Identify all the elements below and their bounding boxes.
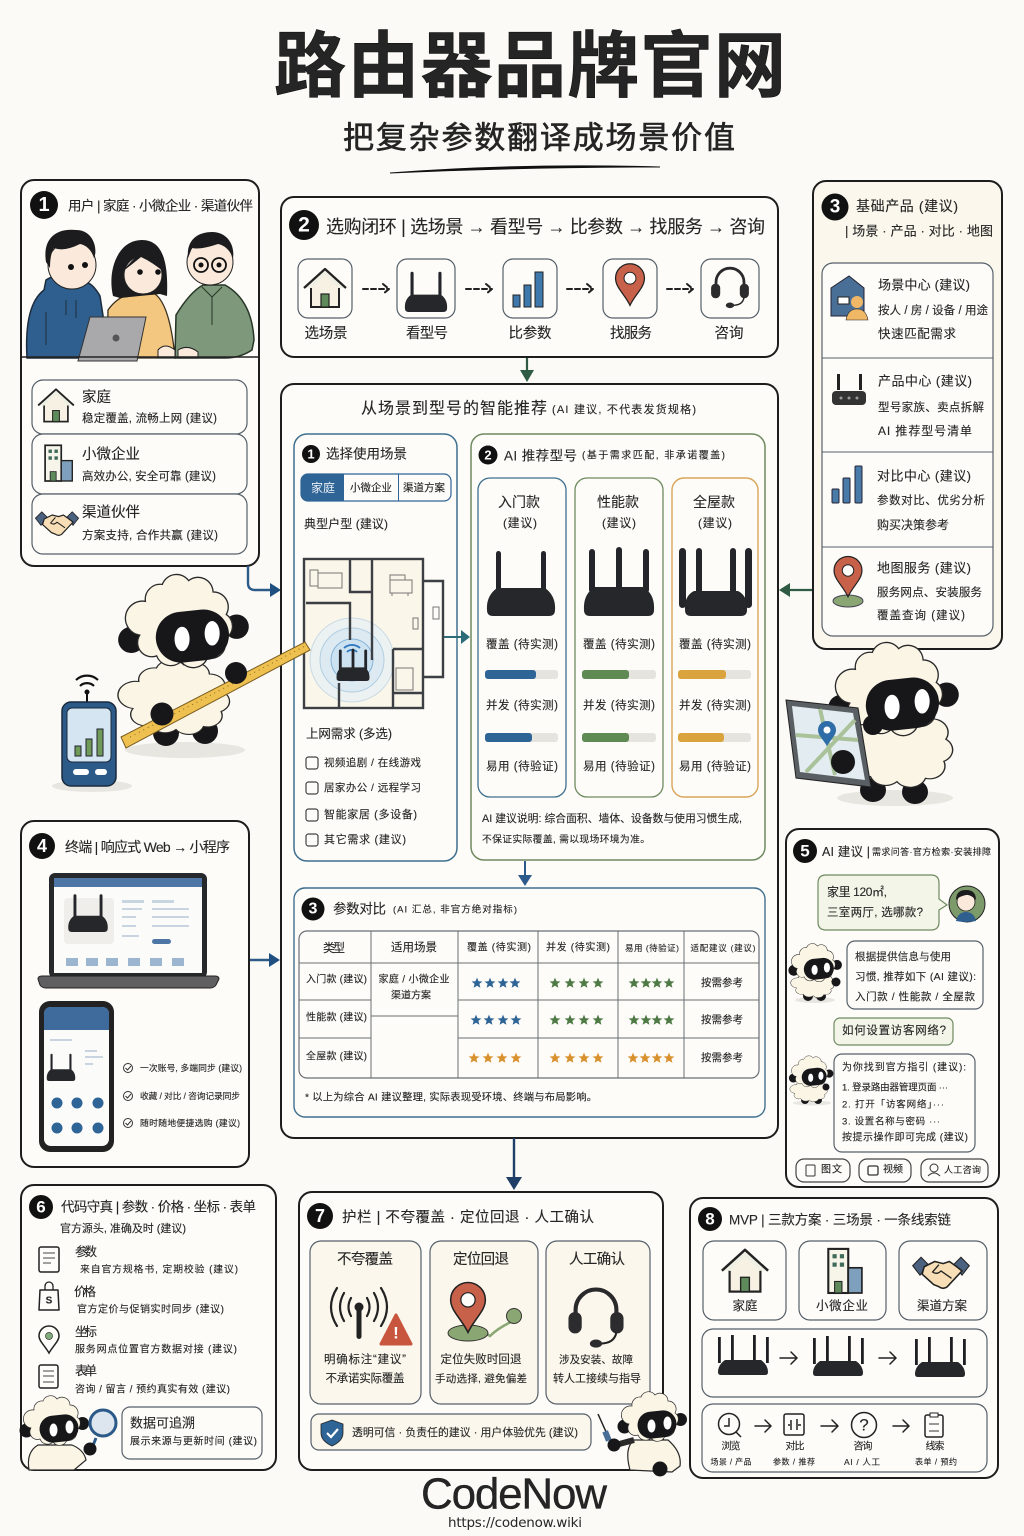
subtitle: 把复杂参数翻译成场景价值 [343,120,735,156]
panel 4: terminals [21,821,249,1167]
badge 3: 3 [830,196,840,218]
arrow head [461,630,470,644]
step: scene [298,259,352,342]
row: lead funnel: 对比 [786,1440,804,1452]
tabs: 家庭 [311,480,335,495]
comparison table: 性能款 (建议) [306,1010,367,1024]
map tablet [786,700,871,787]
main panel heading: (AI 建议, 不代表发货规格) [552,402,696,416]
item: price: 官方定价与促销实时同步 (建议) [77,1302,224,1316]
sub-panel heading: (AI 汇总, 非官方绝对指标) [393,904,517,916]
card: no overclaim: 不承诺实际覆盖 [326,1371,404,1385]
item: coordinates: 服务网点位置官方数据对接 (建议) [75,1342,237,1356]
coverage bar [485,670,558,679]
icon: antenna warning [331,1288,411,1344]
checkbox list: 智能家居 (多设备) [324,807,417,821]
item: coordinates: 坐标 [75,1325,97,1339]
card: location fallback: 定位失败时回退 [440,1352,522,1366]
illustration: phone [39,1001,114,1152]
sub-panel: select scene [294,434,457,861]
assistant steps bubble: 按提示操作即可完成 (建议) [842,1130,968,1144]
icon: compare [784,1414,804,1435]
sub-panel: AI recommended models [471,434,765,860]
icon: pin fallback [448,1282,522,1341]
badge: 2 [484,448,492,462]
badge 5: 5 [800,842,810,860]
traceable data callout: 展示来源与更新时间 (建议) [130,1434,257,1448]
card: entry: 覆盖 (待实测) [486,637,558,651]
panel 3: base products [813,181,1002,649]
mascot: sheep pointing [598,1392,687,1476]
row: product center: AI 推荐型号清单 [878,424,972,438]
row: home: 稳定覆盖, 流畅上网 (建议) [82,411,217,425]
row: scene center: 按人 / 房 / 设备 / 用途 [878,303,988,317]
checkbox list: 居家办公 / 远程学习 [324,781,421,794]
item: form [39,1364,230,1396]
button: video: 视频 [883,1162,903,1176]
badge 8 [698,1207,722,1231]
inner list [822,263,993,636]
badge 1: 1 [38,194,50,216]
panel 8: MVP [690,1198,998,1478]
floor plan label: 典型户型 (建议) [304,516,388,531]
assistant steps bubble: 3. 设置名称与密码 ··· [842,1116,940,1128]
row: compare center: 购买决策参考 [877,517,949,532]
coverage bar [678,670,751,679]
step: service [603,259,657,342]
row: lead funnel: 咨询 [854,1440,872,1452]
panel 5: AI suggestion chat [786,829,999,1187]
user question bubble: 如何设置访客网络? [842,1023,946,1037]
assistant steps bubble: 2. 打开「访客网络」··· [842,1098,944,1110]
AI note: 不保证实际覆盖, 需以现场环境为准。 [482,832,650,846]
tabs: 小微企业 [350,481,392,494]
trust bar: 透明可信 · 负责任的建议 · 用户体验优先 (建议) [352,1425,578,1439]
icon: antenna warning: ! [393,1324,399,1342]
row: map service: 服务网点、安装服务 [877,585,982,599]
icon: browse [718,1414,741,1437]
card: whole home [672,478,758,797]
card: performance [575,478,663,797]
panel 4 heading: 终端 | 响应式 Web → 小程序 [65,839,230,855]
tabs [301,474,451,501]
feature list: 一次账号, 多端同步 (建议) [140,1062,242,1073]
panel 6 heading: 代码守真 | 参数 · 价格 · 坐标 · 表单 [61,1198,256,1214]
row: lead funnel: 浏览 [722,1440,740,1452]
arrow head [779,583,790,597]
comparison table: 并发 (待实测) [546,940,610,954]
card: whole home: 易用 (待验证) [679,759,751,773]
panel 5 heading: AI 建议 | [822,845,870,859]
card: human confirmation: 人工确认 [569,1251,626,1268]
user bubble [818,875,947,930]
card: no overclaim [310,1241,421,1404]
user bubble: 家里 120㎡, [827,884,887,899]
card: location fallback [430,1241,538,1404]
panel 8 heading: MVP | 三款方案 · 三场景 · 一条线索链 [729,1212,952,1228]
item: params [39,1244,238,1276]
badge 3 [822,194,848,220]
arrow: floor plan to recommended models [444,636,462,638]
card: entry: 入门款 [498,494,540,510]
card: no overclaim: 明确标注“建议” [324,1352,406,1366]
row: home: 家庭 [82,389,111,406]
comparison table: 类型 [323,941,345,955]
row: small business: 小微企业 [82,445,140,463]
small sheep [789,1056,833,1106]
button: article [796,1159,850,1182]
illustration: three users with laptop [27,230,254,361]
item: price [39,1282,224,1316]
row: router lineup [702,1329,987,1397]
subtitle swoosh [390,166,660,173]
sub-panel heading: (基于需求匹配, 非承诺覆盖) [582,448,725,462]
badge 7 [307,1203,333,1229]
row: small business: 高效办公, 安全可靠 (建议) [82,469,216,483]
card: channel [899,1241,987,1320]
traceable data callout [122,1407,262,1459]
badge [478,446,498,464]
badge 4 [29,833,55,859]
comparison table: 全屋款 (建议) [306,1050,367,1062]
router [679,548,752,616]
row: compare center [832,466,985,532]
assistant bubble: 根据提供信息与使用 [855,950,951,963]
badge 1 [30,191,58,219]
arrow head [520,370,534,382]
step: model: 看型号 [406,325,448,342]
badge 5 [793,839,817,863]
item: coordinates [39,1325,237,1356]
card: performance: 性能款 [597,494,639,510]
illustration: laptop [38,873,219,988]
icon: clipboard [925,1413,943,1437]
card: entry [478,478,566,797]
comparison table: 按需参考 [701,976,743,989]
arrow head [269,953,280,967]
button: video [859,1159,911,1182]
assistant steps bubble: 1. 登录路由器管理页面 ··· [842,1082,948,1094]
card: channel: 渠道方案 [917,1298,967,1313]
card: whole home: 并发 (待实测) [679,698,751,712]
item: params: 来自官方规格书, 定期校验 (建议) [80,1262,238,1276]
row: map service: 覆盖查询 (建议) [877,608,965,622]
AI note: AI 建议说明: 综合面积、墙体、设备数与使用习惯生成, [482,811,742,825]
row: map service: 地图服务 (建议) [877,560,971,576]
arrow head [270,583,281,597]
row: lead funnel: AI / 人工 [844,1457,880,1467]
badge 6: 6 [36,1198,46,1216]
step: scene: 选场景 [304,325,348,342]
card: small business: 小微企业 [816,1298,868,1313]
feature list: 随时随地便捷选购 (建议) [140,1117,240,1128]
sub-panel heading: 选择使用场景 [326,446,407,462]
row: product center: 型号家族、卖点拆解 [878,400,984,414]
button: human consult [921,1159,988,1182]
row: lead funnel: 线索 [926,1440,944,1452]
icon: question: ? [859,1416,869,1434]
row: scene center: 场景中心 (建议) [878,278,970,292]
ground shadow [125,742,245,758]
comparison table: 覆盖 (待实测) [467,940,531,954]
badge 8: 8 [705,1210,715,1228]
concurrency bar [582,733,656,742]
row: compare center: 参数对比、优劣分析 [877,493,985,507]
user avatar [949,886,985,922]
arrow: recommendation to guardrails [513,1138,515,1178]
arrow [667,284,693,294]
sub-panel heading: 参数对比 [333,900,386,916]
url: https://codenow.wiki [448,1515,582,1531]
card: home: 家庭 [732,1298,758,1313]
item: form: 表单 [75,1364,97,1378]
coverage bar [582,670,656,679]
ruler [121,642,310,748]
user question bubble [834,1018,953,1045]
title: 路由器品牌官网 [274,27,786,107]
row: channel partner [32,494,247,554]
feature list: 收藏 / 对比 / 咨询记录同步 [140,1090,240,1101]
comparison table: 渠道方案 [391,988,431,1002]
card: location fallback: 手动选择, 避免偏差 [435,1372,527,1385]
comparison table: 按需参考 [701,1051,743,1064]
icon: headset [568,1290,624,1348]
checkbox list: 其它需求 (建议) [324,832,406,846]
arrow head [506,1177,522,1190]
sheep body [118,660,230,746]
comparison table: 易用 (待验证) [625,943,679,953]
card: performance: 覆盖 (待实测) [583,637,655,651]
button: human consult: 人工咨询 [944,1164,981,1175]
badge [302,898,324,920]
sub-panel: parameter comparison [294,888,765,1117]
comparison table: 适用场景 [391,940,437,954]
step: compare [503,259,557,342]
row: map service [833,556,982,622]
badge 7: 7 [315,1206,325,1226]
assistant bubble: 入门款 / 性能款 / 全屋款 [855,990,976,1003]
arrow: terminals to recommendation [250,959,270,961]
card: entry: 并发 (待实测) [486,698,558,712]
logo: CodeNow [421,1470,607,1518]
row: compare center: 对比中心 (建议) [877,468,971,484]
table footnote: * 以上为综合 AI 建议整理, 实际表现受环境、终端与布局影响。 [305,1090,597,1104]
main panel: smart recommendation [281,384,778,1138]
card: small business [799,1241,886,1320]
badge 6 [29,1195,53,1219]
card: home [703,1241,786,1320]
router [584,547,654,616]
row: lead funnel: 参数 / 推荐 [773,1456,815,1466]
row: lead funnel [702,1404,987,1472]
card: no overclaim: 不夸覆盖 [337,1251,393,1268]
row: channel partner: 方案支持, 合作共赢 (建议) [82,528,218,542]
card: whole home: 全屋款 [693,494,735,510]
row: product center [832,374,984,438]
step: compare: 比参数 [508,325,552,342]
row: product center: 产品中心 (建议) [878,374,972,388]
row: scene center [831,276,988,341]
comparison table: 家庭 / 小微企业 [378,972,450,986]
panel 3 subheading: | 场景 · 产品 · 对比 · 地图 [845,224,993,238]
panel 1 divider [21,356,259,358]
row: lead funnel: 场景 / 产品 [710,1456,752,1466]
arrow head [518,875,532,886]
item: price: 价格 [74,1284,96,1299]
button: article: 图文 [821,1162,842,1176]
card: performance: 易用 (待验证) [583,759,655,773]
checkbox list: 视频追剧 / 在线游戏 [324,756,422,769]
assistant bubble [847,941,983,1009]
sub-panel heading [504,448,725,464]
panel 1: users [21,180,259,566]
panel 7 heading: 护栏 | 不夸覆盖 · 定位回退 · 人工确认 [342,1209,594,1226]
router [487,551,555,616]
panel 2: purchase loop [281,197,778,357]
badge 4: 4 [37,836,47,856]
step: consult [701,259,759,342]
panel 3 heading: 基础产品 (建议) [856,198,958,214]
step: model [397,259,455,342]
concurrency bar [485,733,558,742]
comparison table [299,931,759,1078]
arrow: loop to recommendation [526,358,528,372]
step: consult: 咨询 [714,325,744,342]
sheep head [118,574,249,668]
arrow: models to comparison [524,861,526,876]
sub-panel heading: AI 推荐型号 [504,448,577,464]
tabs: 渠道方案 [403,481,445,494]
arrow: products to recommendation [790,589,813,591]
AI note [482,811,742,846]
feature list [124,1062,242,1128]
card: entry: (建议) [503,516,537,530]
card: human confirmation [546,1241,650,1404]
item: params: 参数 [75,1244,97,1259]
assistant steps bubble [834,1054,975,1152]
small sheep [788,944,842,1003]
row: channel partner: 渠道伙伴 [82,504,140,521]
panel 1 heading: 用户 | 家庭 · 小微企业 · 渠道伙伴 [68,198,253,214]
item: price: S [46,1296,53,1306]
comparison table: 按需参考 [701,1013,743,1026]
star ratings [469,978,674,1063]
row: lead funnel: 表单 / 预约 [915,1456,957,1466]
concurrency bar [678,733,751,742]
mascot: sheep with map tablet [786,642,959,806]
badge 2 [289,210,319,240]
panel 5 heading [822,845,991,859]
checkbox list [306,756,422,846]
sub-panel heading [333,900,517,916]
panel 7: guardrails [299,1192,687,1476]
row: home [32,380,247,434]
card: entry: 易用 (待验证) [486,759,558,773]
main panel heading [361,400,696,418]
main panel heading: 从场景到型号的智能推荐 [361,400,547,418]
arrow [567,284,593,294]
user bubble: 三室两厅, 选哪款? [827,905,923,919]
card: performance: (建议) [602,516,636,530]
mascot: sheep with ruler and signal device [52,574,310,792]
trust bar [311,1414,591,1450]
badge [302,445,320,463]
traceable data callout: 数据可追溯 [130,1416,195,1430]
mascot: sheep with magnifier [20,1396,116,1470]
comparison table: 适配建议 (建议) [690,943,756,953]
card: human confirmation: 涉及安装、故障 [559,1353,634,1366]
card: location fallback: 定位回退 [453,1251,509,1268]
arrow [363,284,389,294]
arrow: users to recommendation [248,567,272,590]
comparison table: 入门款 (建议) [306,972,367,986]
card: human confirmation: 转人工接续与指导 [553,1371,641,1385]
assistant bubble: 习惯, 推荐如下 (AI 建议): [855,970,976,983]
row: small business [32,434,247,494]
panel 6 subheading: 官方源头, 准确及时 (建议) [60,1221,186,1235]
item: form: 咨询 / 留言 / 预约真实有效 (建议) [75,1382,230,1396]
arrow [466,284,492,294]
signal device [52,676,132,792]
step: service: 找服务 [610,325,652,342]
assistant steps bubble: 为你找到官方指引 (建议): [842,1060,966,1074]
panel 6: code truth [20,1185,276,1470]
needs label: 上网需求 (多选) [306,727,392,741]
badge: 1 [307,446,315,462]
floor plan with wifi coverage [303,558,443,709]
badge: 3 [309,900,318,918]
row: scene center: 快速匹配需求 [878,327,956,341]
card: whole home: (建议) [698,516,732,530]
panel 5 heading: 需求问答·官方检索·安装排障 [872,846,991,857]
card: whole home: 覆盖 (待实测) [679,637,751,651]
card: performance: 并发 (待实测) [583,698,655,712]
icon: question [852,1412,876,1438]
badge 2: 2 [298,214,310,236]
panel 2 heading: 选购闭环 | 选场景 → 看型号 → 比参数 → 找服务 → 咨询 [326,217,765,237]
